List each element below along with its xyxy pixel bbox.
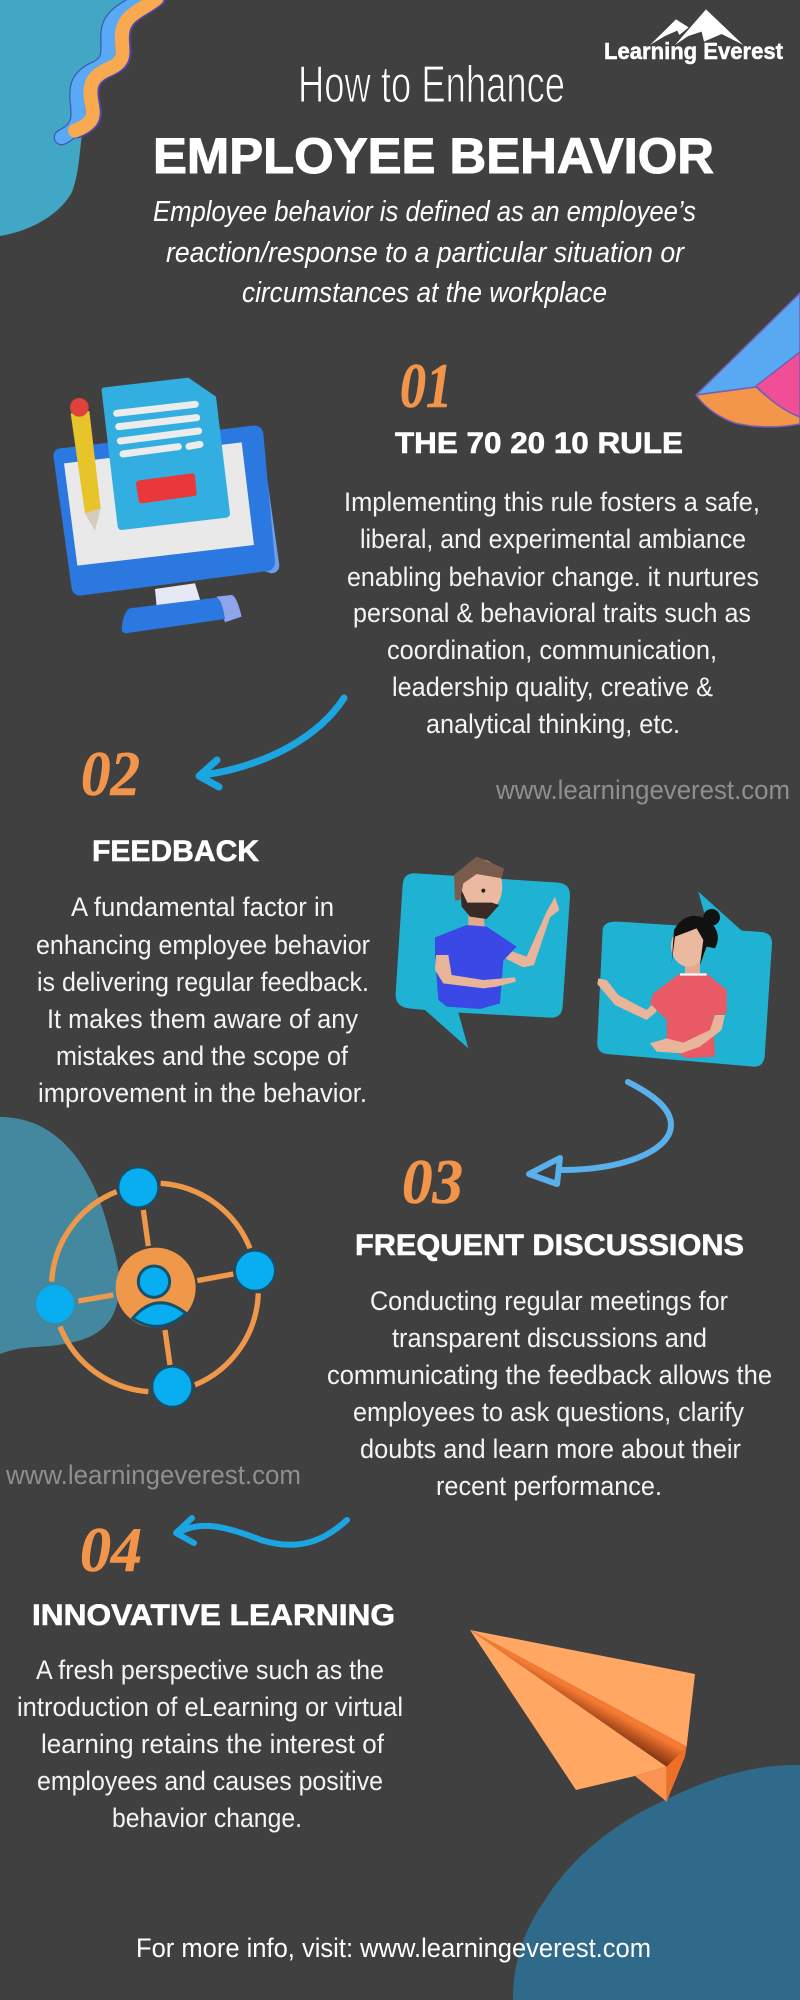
man in speech bubble xyxy=(396,857,570,1048)
step 04 heading xyxy=(32,1515,395,1632)
step 01 heading: 01 xyxy=(400,351,452,421)
intro text: circumstances at the workplace xyxy=(242,277,607,309)
step 03 body: transparent discussions and xyxy=(392,1323,707,1353)
footer link: For more info, visit: www.learningeverest.com xyxy=(136,1933,651,1963)
intro text: Employee behavior is defined as an employee’s xyxy=(153,196,696,228)
arrow: step 2 to 3 xyxy=(529,1082,671,1184)
woman in speech bubble xyxy=(597,892,772,1067)
icon: people network xyxy=(35,1167,275,1407)
step 03 body: employees to ask questions, clarify xyxy=(353,1397,744,1427)
title: How to Enhance xyxy=(298,56,565,114)
step 03 heading xyxy=(355,1147,744,1262)
step 01 body: enabling behavior change. it nurtures xyxy=(347,562,759,592)
arrow: step 1 to 2 xyxy=(199,698,344,787)
step 02 body: A fundamental factor in xyxy=(71,892,334,922)
step 04 body: behavior change. xyxy=(112,1803,302,1833)
step 03 body: Conducting regular meetings for xyxy=(370,1286,728,1316)
step 03 body: communicating the feedback allows the xyxy=(327,1360,772,1390)
icon: paper plane xyxy=(470,1630,695,1802)
step 04 body: learning retains the interest of xyxy=(41,1729,384,1759)
title: EMPLOYEE BEHAVIOR xyxy=(153,128,714,184)
step 01 body: Implementing this rule fosters a safe, xyxy=(344,487,760,517)
step 02 body: is delivering regular feedback. xyxy=(37,967,369,997)
step 02 heading: FEEDBACK xyxy=(92,835,259,868)
decorative blob: top left xyxy=(0,0,135,236)
step 04 heading: INNOVATIVE LEARNING xyxy=(32,1599,395,1632)
step 03 body: doubts and learn more about their xyxy=(360,1434,741,1464)
intro text: reaction/response to a particular situation or xyxy=(166,237,685,269)
step 02 heading: 02 xyxy=(81,739,140,809)
step 01 body: personal & behavioral traits such as xyxy=(353,598,751,628)
step 01 body: liberal, and experimental ambiance xyxy=(360,524,746,554)
step 03 heading: 03 xyxy=(402,1147,463,1217)
step 02 heading xyxy=(81,739,259,868)
decorative squiggle: top left xyxy=(62,0,159,137)
step 02 body: improvement in the behavior. xyxy=(38,1078,367,1108)
step 04 heading: 04 xyxy=(80,1515,142,1585)
step 04 body: A fresh perspective such as the xyxy=(36,1655,384,1685)
step 03 body: recent performance. xyxy=(436,1471,662,1501)
step 04 body xyxy=(17,1655,403,1833)
icon: computer with document xyxy=(53,378,279,633)
blob behind network icon xyxy=(0,1117,119,1354)
step 02 body: It makes them aware of any xyxy=(47,1004,358,1034)
step 01 body: leadership quality, creative & xyxy=(392,672,713,702)
decorative blob: bottom right xyxy=(513,1765,800,2000)
website watermark: www.learningeverest.com xyxy=(5,1460,301,1490)
step 01 body xyxy=(344,487,760,739)
intro text xyxy=(153,196,696,309)
step 03 body xyxy=(327,1286,772,1501)
step 01 heading xyxy=(395,351,683,460)
logo: Learning Everest: Learning Everest xyxy=(604,38,783,64)
step 02 body xyxy=(36,892,370,1108)
step 02 body: mistakes and the scope of xyxy=(56,1041,348,1071)
website watermark: www.learningeverest.com xyxy=(495,775,790,805)
step 01 heading: THE 70 20 10 RULE xyxy=(395,427,683,460)
step 03 heading: FREQUENT DISCUSSIONS xyxy=(355,1229,744,1262)
title xyxy=(153,56,714,184)
step 02 body: enhancing employee behavior xyxy=(36,930,370,960)
decorative prism: top right xyxy=(696,293,800,427)
step 01 body: analytical thinking, etc. xyxy=(426,709,680,739)
illustration: two people in speech bubbles xyxy=(396,857,772,1067)
arrow: step 3 to 4 xyxy=(176,1518,347,1545)
step 04 body: employees and causes positive xyxy=(37,1766,383,1796)
logo: Learning Everest xyxy=(604,9,783,64)
step 01 body: coordination, communication, xyxy=(387,635,717,665)
step 04 body: introduction of eLearning or virtual xyxy=(17,1692,403,1722)
